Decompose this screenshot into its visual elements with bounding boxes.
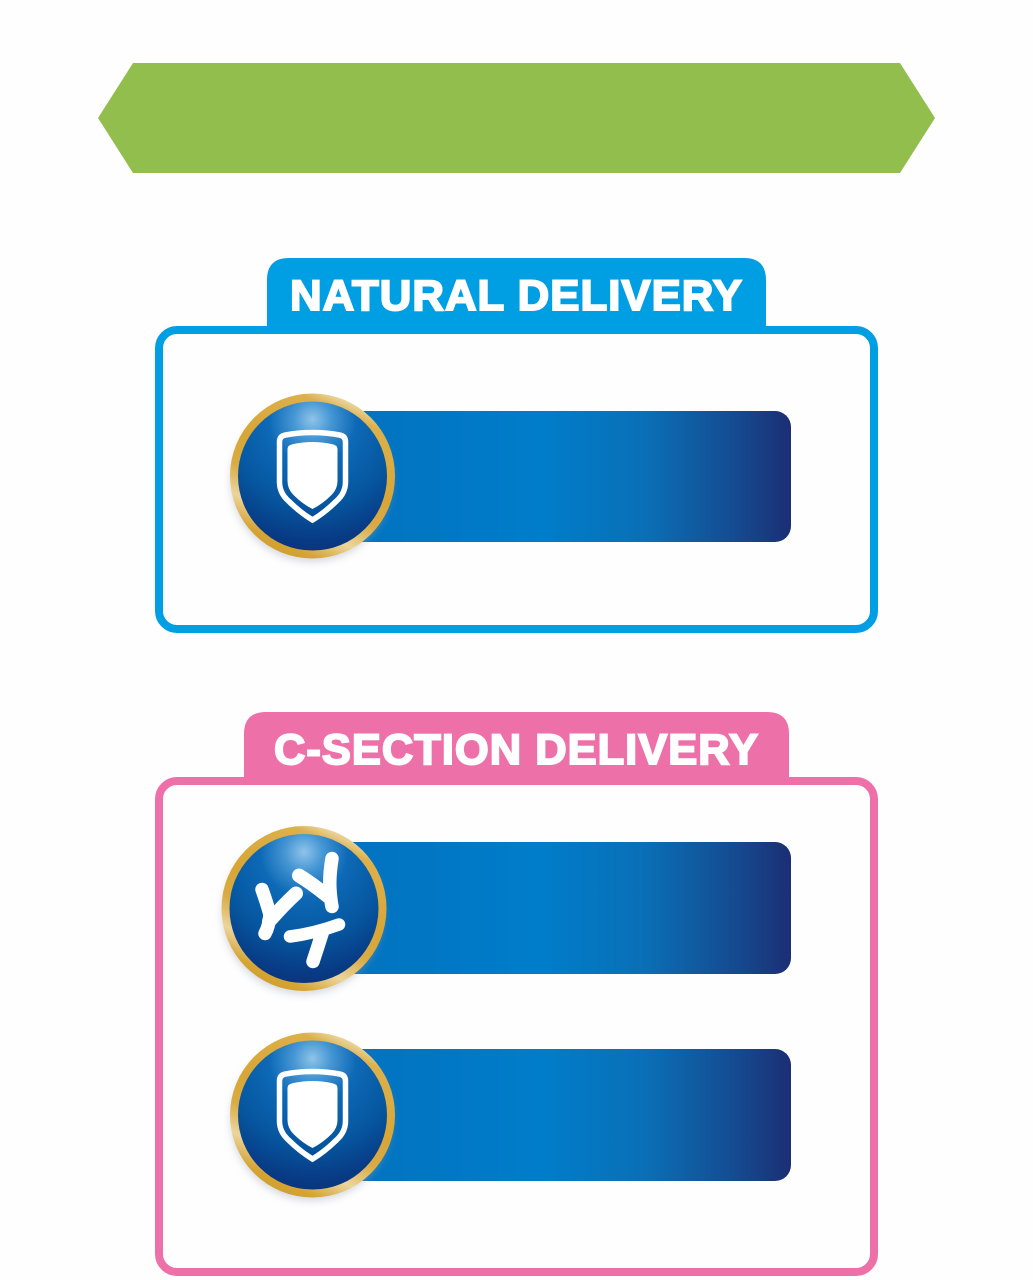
blue text bar 1 bbox=[335, 842, 791, 974]
panel: c-section delivery bbox=[159, 712, 874, 1272]
title banner bbox=[98, 63, 935, 173]
panel frame: c-section delivery bbox=[159, 781, 874, 1272]
icon: shield bbox=[230, 1032, 395, 1201]
heading: natural delivery: NATURAL DELIVERY bbox=[290, 272, 743, 320]
heading tab: c-section delivery bbox=[244, 712, 789, 785]
icon: shield bbox=[230, 394, 395, 562]
blue text bar 2 bbox=[340, 1049, 791, 1181]
heading: c-section delivery: C-SECTION DELIVERY bbox=[274, 726, 759, 774]
heading tab: natural delivery bbox=[267, 258, 766, 334]
panel frame: natural delivery bbox=[159, 330, 874, 629]
icon: antibodies bbox=[222, 826, 386, 994]
panel: natural delivery bbox=[159, 258, 874, 629]
blue text bar bbox=[340, 411, 791, 542]
